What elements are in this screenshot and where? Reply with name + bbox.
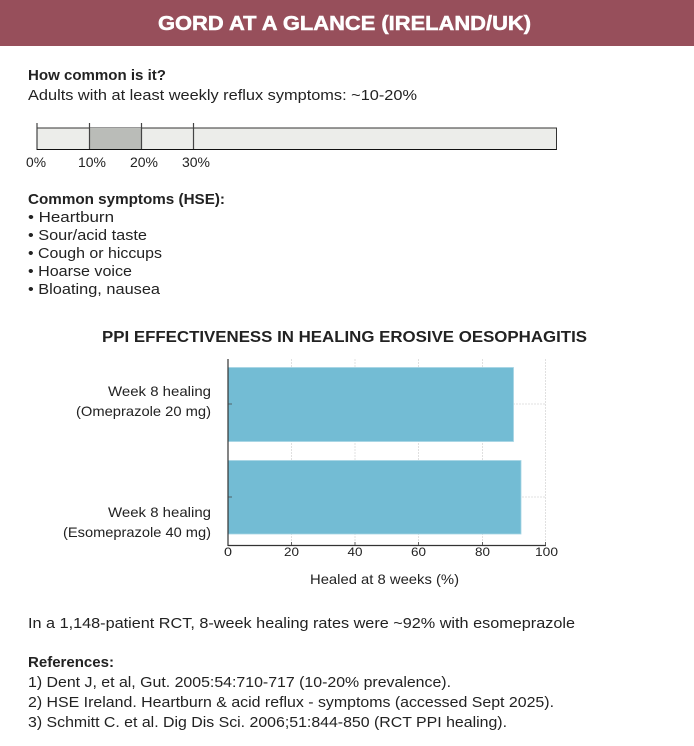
- text block: RCT summary: In a 1,148-patient RCT, 8-week healing rates were ~92% with esomeprazole: [28, 615, 575, 632]
- x axis tick labels: [224, 545, 558, 559]
- category labels: Week 8 healing: [108, 383, 211, 399]
- x axis tick labels: 40: [348, 545, 363, 559]
- text block: common symptoms: Common symptoms (HSE):: [28, 191, 225, 208]
- x axis tick labels: 80: [475, 545, 490, 559]
- header banner: GORD AT A GLANCE (IRELAND/UK): [158, 13, 531, 35]
- text block: how common is it: How common is it?: [28, 67, 166, 84]
- prevalence range bar: [26, 123, 556, 170]
- bar: omeprazole 90%: [228, 368, 514, 442]
- x axis tick labels: 60: [411, 545, 426, 559]
- references: [28, 654, 554, 731]
- text block: how common is it: Adults with at least weekly reflux symptoms: ~10-20%: [28, 87, 417, 104]
- text block: how common is it: [28, 67, 417, 104]
- x axis tick labels: 100: [535, 545, 558, 559]
- x axis title: Healed at 8 weeks (%): [310, 571, 459, 587]
- prevalence range bar: 10%: [78, 155, 106, 170]
- text block: common symptoms: • Bloating, nausea: [28, 281, 161, 298]
- prevalence range bar: 20%: [130, 155, 158, 170]
- prevalence range bar: 0%: [26, 155, 46, 170]
- text block: common symptoms: • Cough or hiccups: [28, 245, 162, 262]
- references: 2) HSE Ireland. Heartburn & acid reflux - symptoms (accessed Sept 2025).: [28, 694, 554, 711]
- category labels: Week 8 healing: [108, 504, 211, 520]
- text block: common symptoms: • Sour/acid taste: [28, 227, 147, 244]
- prevalence range bar: 30%: [182, 155, 210, 170]
- x axis tick labels: 20: [284, 545, 299, 559]
- references: 3) Schmitt C. et al. Dig Dis Sci. 2006;51:844-850 (RCT PPI healing).: [28, 714, 507, 731]
- category labels: [63, 383, 211, 540]
- references: 1) Dent J, et al, Gut. 2005:54:710-717 (10-20% prevalence).: [28, 674, 451, 691]
- text block: common symptoms: • Hoarse voice: [28, 263, 132, 280]
- category labels: (Omeprazole 20 mg): [76, 403, 211, 419]
- header banner: [0, 0, 694, 46]
- category labels: (Esomeprazole 40 mg): [63, 524, 211, 540]
- chart title: PPI EFFECTIVENESS IN HEALING EROSIVE OESOPHAGITIS: [102, 329, 587, 346]
- references: References:: [28, 654, 114, 671]
- bar: esomeprazole 92%: [228, 460, 521, 534]
- text block: common symptoms: • Heartburn: [28, 209, 114, 226]
- x axis tick labels: 0: [224, 545, 232, 559]
- bar chart: PPI healing rates: [63, 359, 558, 587]
- text block: common symptoms: [28, 191, 225, 298]
